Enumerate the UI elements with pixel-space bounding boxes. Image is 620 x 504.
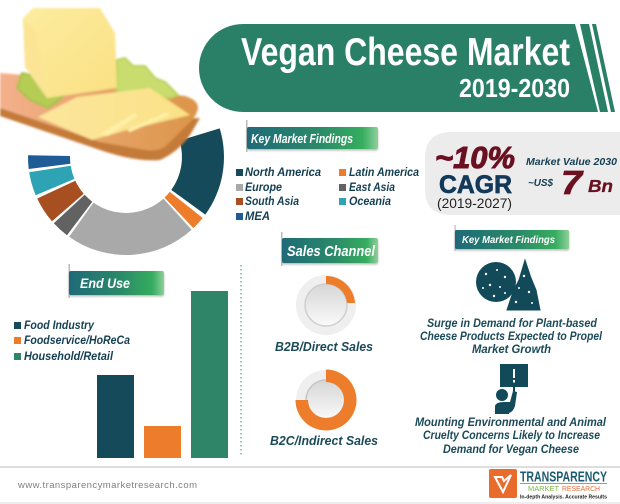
text: plant-based demand finding — [420, 318, 603, 356]
tag: key market findings secondary — [454, 225, 569, 251]
market value figure: Bn — [588, 176, 613, 196]
text: plant-based demand finding: Cheese Products Expected to Propel — [420, 331, 603, 343]
legend: regions: Europe — [245, 182, 283, 194]
market value figure: 7 — [561, 164, 584, 201]
legend: regions: MEA — [245, 211, 270, 223]
legend: regions: South Asia — [245, 196, 300, 208]
text: environmental concerns finding: Cruelty Concerns Likely to Increase — [423, 430, 601, 442]
CAGR period: (2019-2027) — [437, 195, 512, 211]
logo: Transparency Market Research: MARKET — [528, 486, 560, 493]
legend: end use: Foodservice/HoReCa — [24, 335, 131, 347]
legend: end use: Household/Retail — [24, 351, 114, 363]
tag: sales channel: Sales Channel — [287, 244, 376, 260]
icon: person holding warning sign — [495, 364, 528, 414]
title years: 2019-2030 — [459, 73, 570, 103]
legend: end use: Food Industry — [24, 320, 95, 332]
legend: regions — [236, 167, 420, 223]
legend: regions: North America — [245, 167, 322, 179]
legend: end use — [14, 320, 131, 363]
bar chart: end use — [97, 291, 228, 458]
illustration: cheese on a wooden board — [0, 8, 200, 160]
donut: B2B direct sales — [296, 275, 356, 335]
tag: key market findings: Key Market Findings — [251, 131, 353, 146]
donut chart: regional share — [28, 128, 224, 255]
legend: regions: Latin America — [349, 167, 420, 179]
tag: end use — [68, 264, 164, 298]
market value figure — [528, 164, 613, 201]
footer url: www.transparencymarketresearch.com — [17, 480, 197, 491]
text: plant-based demand finding: Market Growth — [472, 344, 551, 356]
label: B2C indirect sales: B2C/Indirect Sales — [270, 433, 378, 448]
legend: regions: East Asia — [349, 182, 396, 194]
text: environmental concerns finding: Mounting Environmental and Animal — [415, 417, 607, 429]
donut: B2C indirect sales — [296, 370, 356, 430]
logo: Transparency Market Research: In-depth Analysis. Accurate Results — [520, 494, 607, 500]
text: environmental concerns finding — [415, 417, 607, 456]
tag: key market findings — [246, 120, 378, 152]
text: environmental concerns finding: Demand for Vegan Cheese — [443, 444, 580, 456]
tag: end use: End Use — [80, 275, 130, 291]
CAGR percentage: ~10% — [435, 140, 515, 175]
panel: CAGR and market value — [425, 132, 620, 215]
tag: sales channel — [281, 232, 378, 266]
text: plant-based demand finding: Surge in Demand for Plant-based — [427, 318, 598, 330]
market value label: Market Value 2030 — [526, 156, 617, 168]
tag: key market findings secondary: Key Market Findings — [462, 235, 555, 246]
logo: Transparency Market Research: RESEARCH — [562, 486, 600, 493]
label: B2B direct sales: B2B/Direct Sales — [275, 339, 373, 354]
CAGR label: CAGR — [439, 171, 512, 199]
title banner — [199, 24, 615, 112]
market value figure: ~US$ — [528, 178, 553, 189]
legend: regions: Oceania — [349, 196, 392, 208]
icon: cheese wheel and wedge — [476, 260, 540, 310]
logo: Transparency Market Research — [489, 468, 607, 500]
